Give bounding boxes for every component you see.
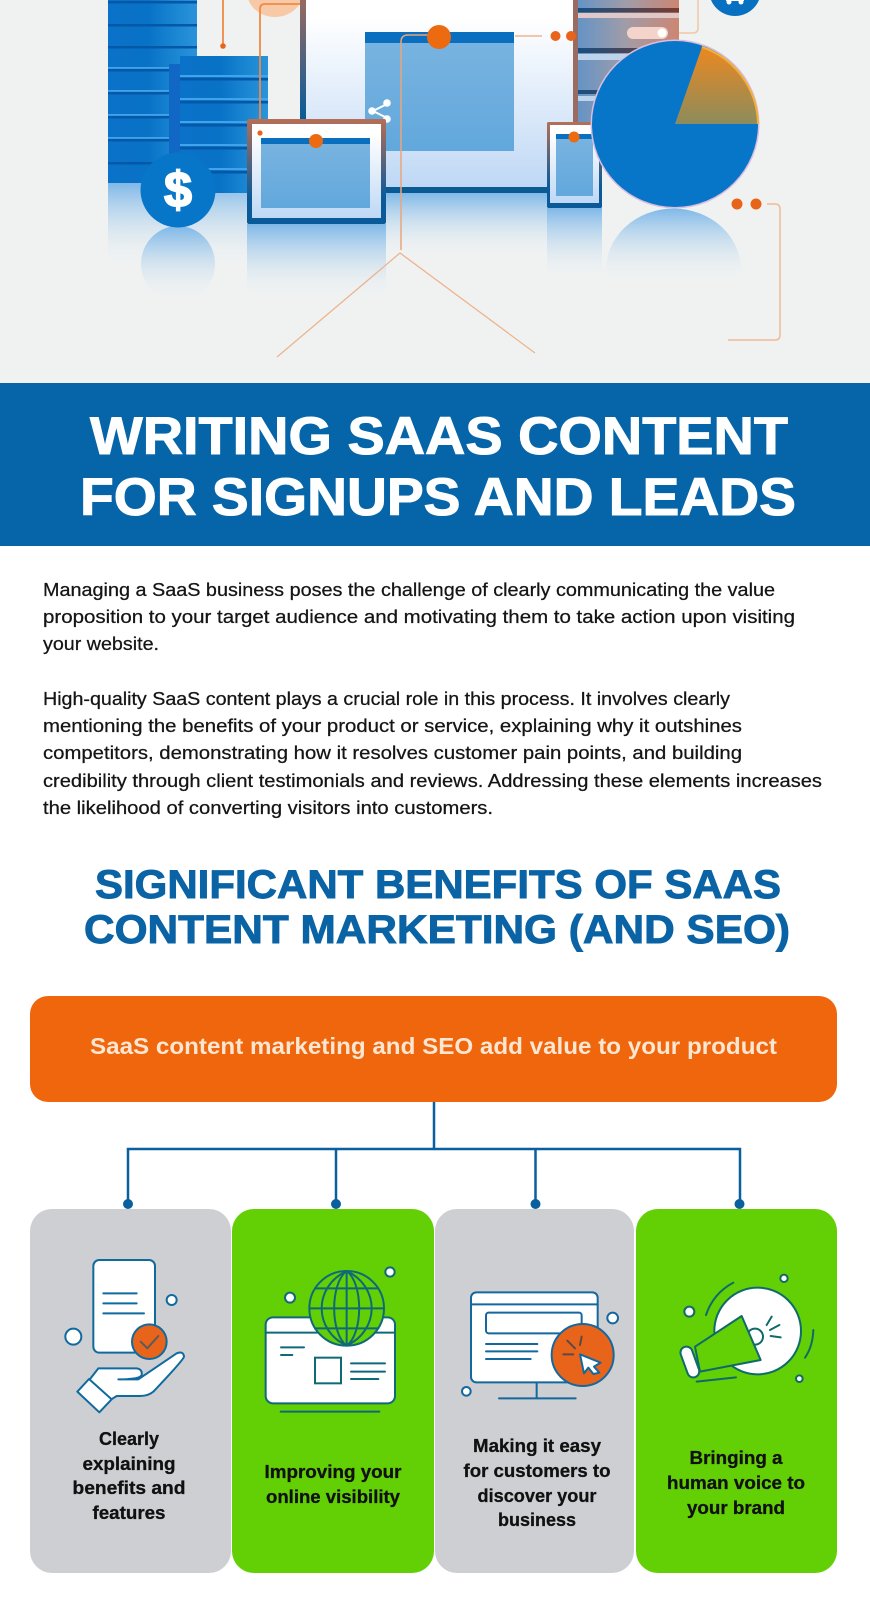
icon: monitor with cursor — [462, 1292, 618, 1398]
icon: dollar coin: $ — [164, 162, 192, 218]
intro paragraph 1 — [43, 580, 795, 654]
caption: Improving your — [264, 1461, 402, 1482]
caption: online visibility — [266, 1486, 401, 1507]
icon: cart badge — [709, 0, 761, 16]
card 3: easy to discover — [435, 1209, 634, 1573]
caption: Making it easy — [473, 1435, 602, 1456]
icon: server rack — [573, 0, 698, 124]
intro paragraph 2: mentioning the benefits of your product or service, explaining why it outshines — [43, 716, 742, 736]
title banner — [0, 383, 870, 546]
intro paragraph 2: credibility through client testimonials and reviews. Addressing these elements increases — [43, 771, 822, 791]
intro paragraph 1: proposition to your target audience and motivating them to take action upon visiting — [43, 607, 795, 627]
title — [80, 407, 796, 527]
caption: benefits and — [72, 1477, 186, 1498]
section heading — [84, 863, 790, 952]
caption — [464, 1435, 610, 1530]
caption: for customers to — [464, 1460, 610, 1481]
orange callout box — [30, 996, 837, 1102]
icon: document in hand — [65, 1260, 184, 1412]
intro paragraph 2: competitors, demonstrating how it resolves customer pain points, and building — [43, 743, 742, 763]
section heading: SIGNIFICANT BENEFITS OF SAAS — [95, 863, 781, 907]
right connector — [728, 198, 780, 340]
caption: human voice to — [667, 1472, 805, 1493]
orange connector lines — [223, 0, 315, 133]
icon: tablet — [247, 119, 386, 224]
card 1: clearly explaining benefits — [30, 1209, 231, 1573]
intro paragraph 1: Managing a SaaS business poses the challenge of clearly communicating the value — [43, 580, 775, 600]
caption: discover your — [478, 1485, 596, 1506]
connector tree — [123, 1102, 744, 1209]
card 4: human voice — [636, 1209, 837, 1573]
icon: dollar coin — [140, 152, 216, 228]
pie chart — [590, 40, 760, 208]
peach shape — [247, 0, 303, 17]
icon: server stack left — [108, 0, 197, 183]
tent lines — [277, 253, 535, 357]
caption: features — [92, 1502, 166, 1523]
caption: your brand — [687, 1497, 785, 1518]
caption: explaining — [82, 1453, 176, 1474]
intro paragraph 2: the likelihood of converting visitors into customers. — [43, 798, 493, 818]
caption — [72, 1428, 186, 1523]
caption — [264, 1461, 402, 1507]
caption — [667, 1447, 805, 1518]
title: WRITING SAAS CONTENT — [90, 407, 788, 466]
connector dots — [550, 31, 576, 41]
section heading: CONTENT MARKETING (AND SEO) — [84, 908, 790, 952]
intro paragraph 1: your website. — [43, 634, 159, 654]
window connector — [401, 25, 542, 250]
floor reflections — [108, 183, 741, 302]
orange callout box: SaaS content marketing and SEO add value to your product — [90, 1033, 777, 1059]
icon: share — [368, 99, 391, 123]
caption: Bringing a — [690, 1447, 783, 1468]
caption: business — [498, 1509, 576, 1530]
icon: browser with globe — [266, 1267, 395, 1412]
hero illustration panel — [0, 0, 870, 383]
icon: megaphone — [679, 1275, 813, 1382]
caption: Clearly — [99, 1428, 160, 1449]
icon: phone — [547, 122, 602, 208]
intro paragraph 2: High-quality SaaS content plays a crucial role in this process. It involves clearly — [43, 689, 730, 709]
title: FOR SIGNUPS AND LEADS — [80, 468, 796, 527]
icon: monitor — [300, 0, 575, 193]
icon: server stack right — [180, 56, 268, 193]
intro paragraph 2 — [43, 689, 822, 818]
card 2: improving online visibility — [232, 1209, 434, 1573]
